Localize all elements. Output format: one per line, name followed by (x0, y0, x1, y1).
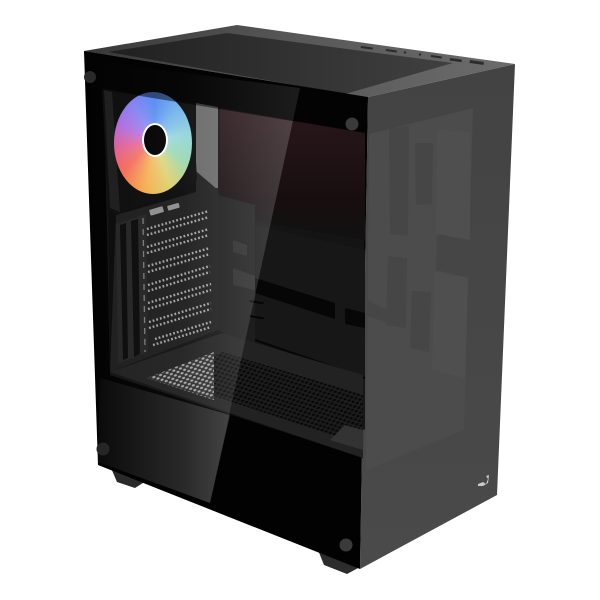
top panel (84, 25, 515, 97)
rear panel with PCI slots (107, 90, 218, 372)
fan frame (102, 88, 197, 215)
side panel interior outlines (366, 108, 473, 470)
interior back wall (104, 90, 365, 458)
interior upper red glow (220, 108, 365, 240)
grey exhaust surround (196, 103, 218, 192)
case floor (110, 333, 363, 458)
fan hub (142, 123, 168, 157)
screw: top right (346, 118, 358, 130)
screw: bottom left (96, 442, 110, 456)
top mesh (108, 33, 453, 94)
PCI slot rows (147, 211, 211, 345)
front glass panel (84, 51, 368, 569)
foot: left (111, 468, 146, 488)
motherboard tray lines (218, 195, 365, 430)
screw: bottom right (340, 538, 352, 552)
front glass top band (84, 51, 368, 133)
fan rainbow blades (114, 92, 192, 194)
front I/O ports (361, 46, 484, 65)
lower glass reflection (98, 378, 230, 503)
screw: top left (84, 71, 96, 83)
brand logo: scorpion (478, 475, 489, 486)
right side glass panel (360, 64, 515, 569)
glass reflection (86, 60, 300, 503)
foot: right (318, 550, 360, 574)
